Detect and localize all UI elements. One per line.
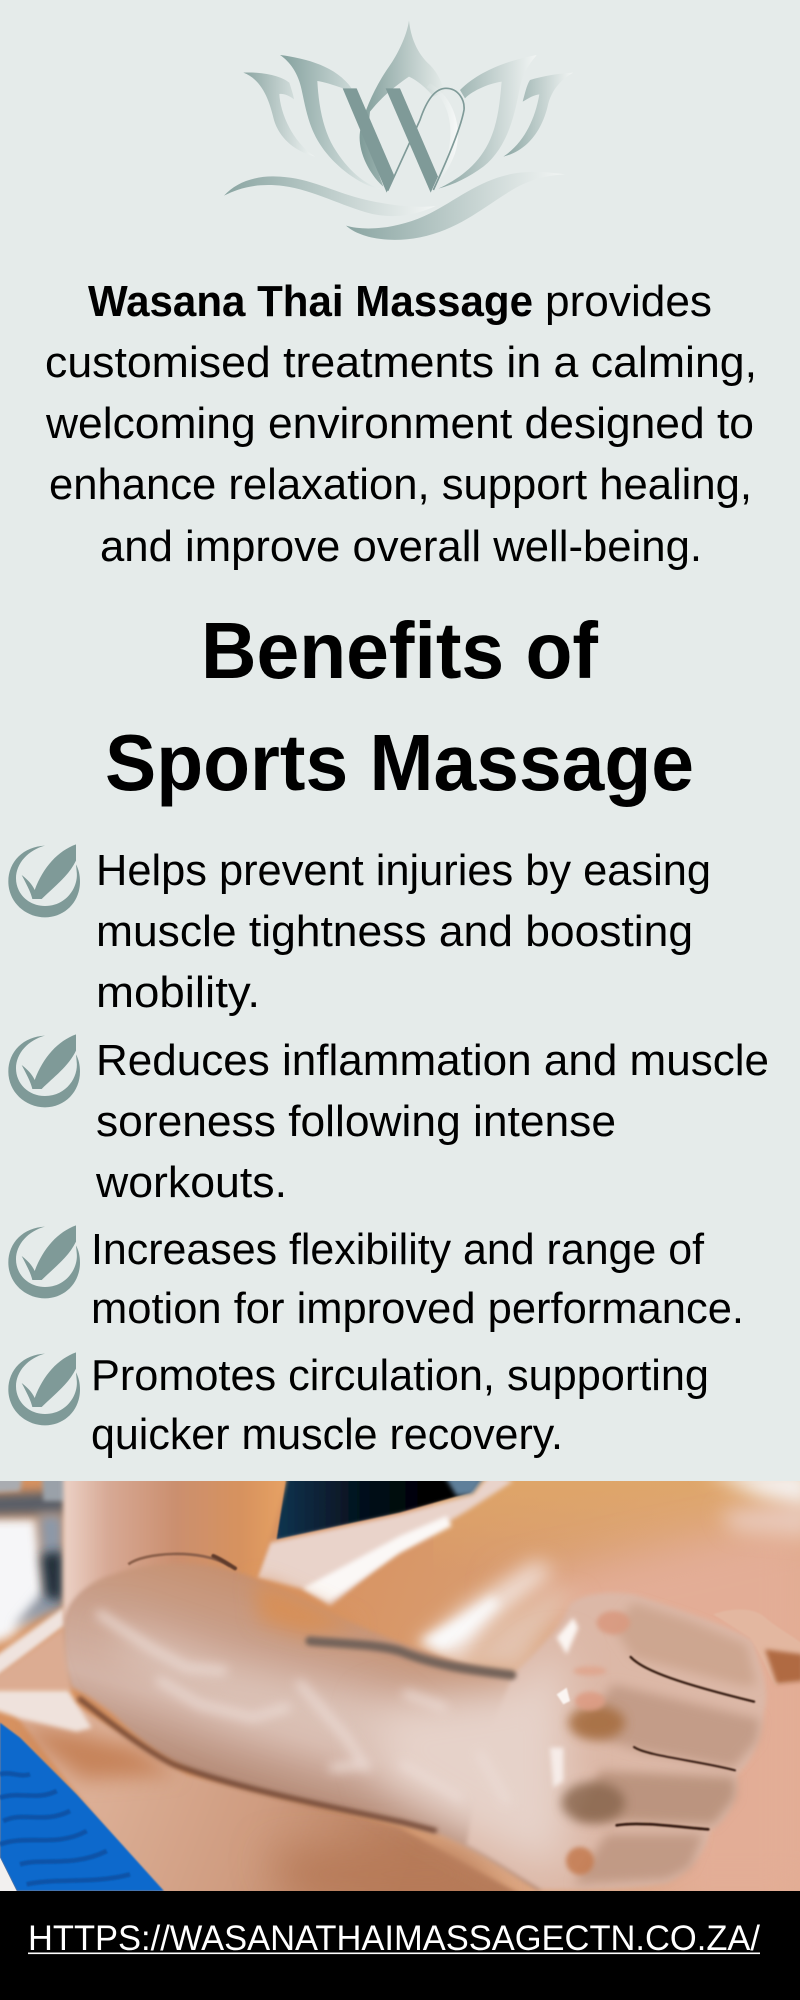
benefit 2 text: workouts. xyxy=(95,1158,287,1207)
benefit 1 text: muscle tightness and boosting xyxy=(96,907,693,956)
footer bar xyxy=(0,1891,800,2000)
footer url: HTTPS://WASANATHAIMASSAGECTN.CO.ZA/ xyxy=(28,1919,760,1958)
intro paragraph: and improve overall well-being. xyxy=(100,522,702,571)
heading xyxy=(105,606,694,807)
intro paragraph: welcoming environment designed to xyxy=(45,399,754,448)
benefit 1 text xyxy=(96,846,711,1017)
photo: massage forearm and fist xyxy=(0,1468,800,1898)
heading: Benefits of xyxy=(201,606,598,695)
benefit 2 xyxy=(8,1034,769,1207)
icon: check 3 xyxy=(8,1225,80,1298)
intro paragraph xyxy=(45,277,757,571)
heading: Sports Massage xyxy=(105,718,694,807)
benefit 1 xyxy=(8,844,711,1017)
logo: Wasana lotus xyxy=(224,21,573,240)
forearm highlights xyxy=(100,1614,507,1801)
benefit 2 text: Reduces inflammation and muscle xyxy=(96,1036,769,1085)
benefit 3 xyxy=(8,1225,744,1333)
benefit 4 text: quicker muscle recovery. xyxy=(91,1410,563,1459)
intro paragraph: customised treatments in a calming, xyxy=(45,338,757,387)
benefit 4 text: Promotes circulation, supporting xyxy=(91,1351,709,1400)
benefit 2 text xyxy=(95,1036,769,1207)
intro paragraph: enhance relaxation, support healing, xyxy=(49,460,752,509)
intro paragraph: provides xyxy=(545,277,712,326)
benefit 3 text: motion for improved performance. xyxy=(91,1284,744,1333)
benefit 3 text xyxy=(91,1225,744,1333)
intro paragraph: Wasana Thai Massage xyxy=(88,277,533,326)
benefit 1 text: mobility. xyxy=(96,968,260,1017)
benefit 4 xyxy=(8,1351,709,1459)
benefit 4 text xyxy=(91,1351,709,1459)
benefit 3 text: Increases flexibility and range of xyxy=(91,1225,705,1274)
icon: check 1 xyxy=(8,844,80,917)
icon: check 2 xyxy=(8,1034,80,1107)
icon: check 4 xyxy=(8,1352,80,1425)
benefit 2 text: soreness following intense xyxy=(96,1097,616,1146)
benefit 1 text: Helps prevent injuries by easing xyxy=(96,846,711,895)
